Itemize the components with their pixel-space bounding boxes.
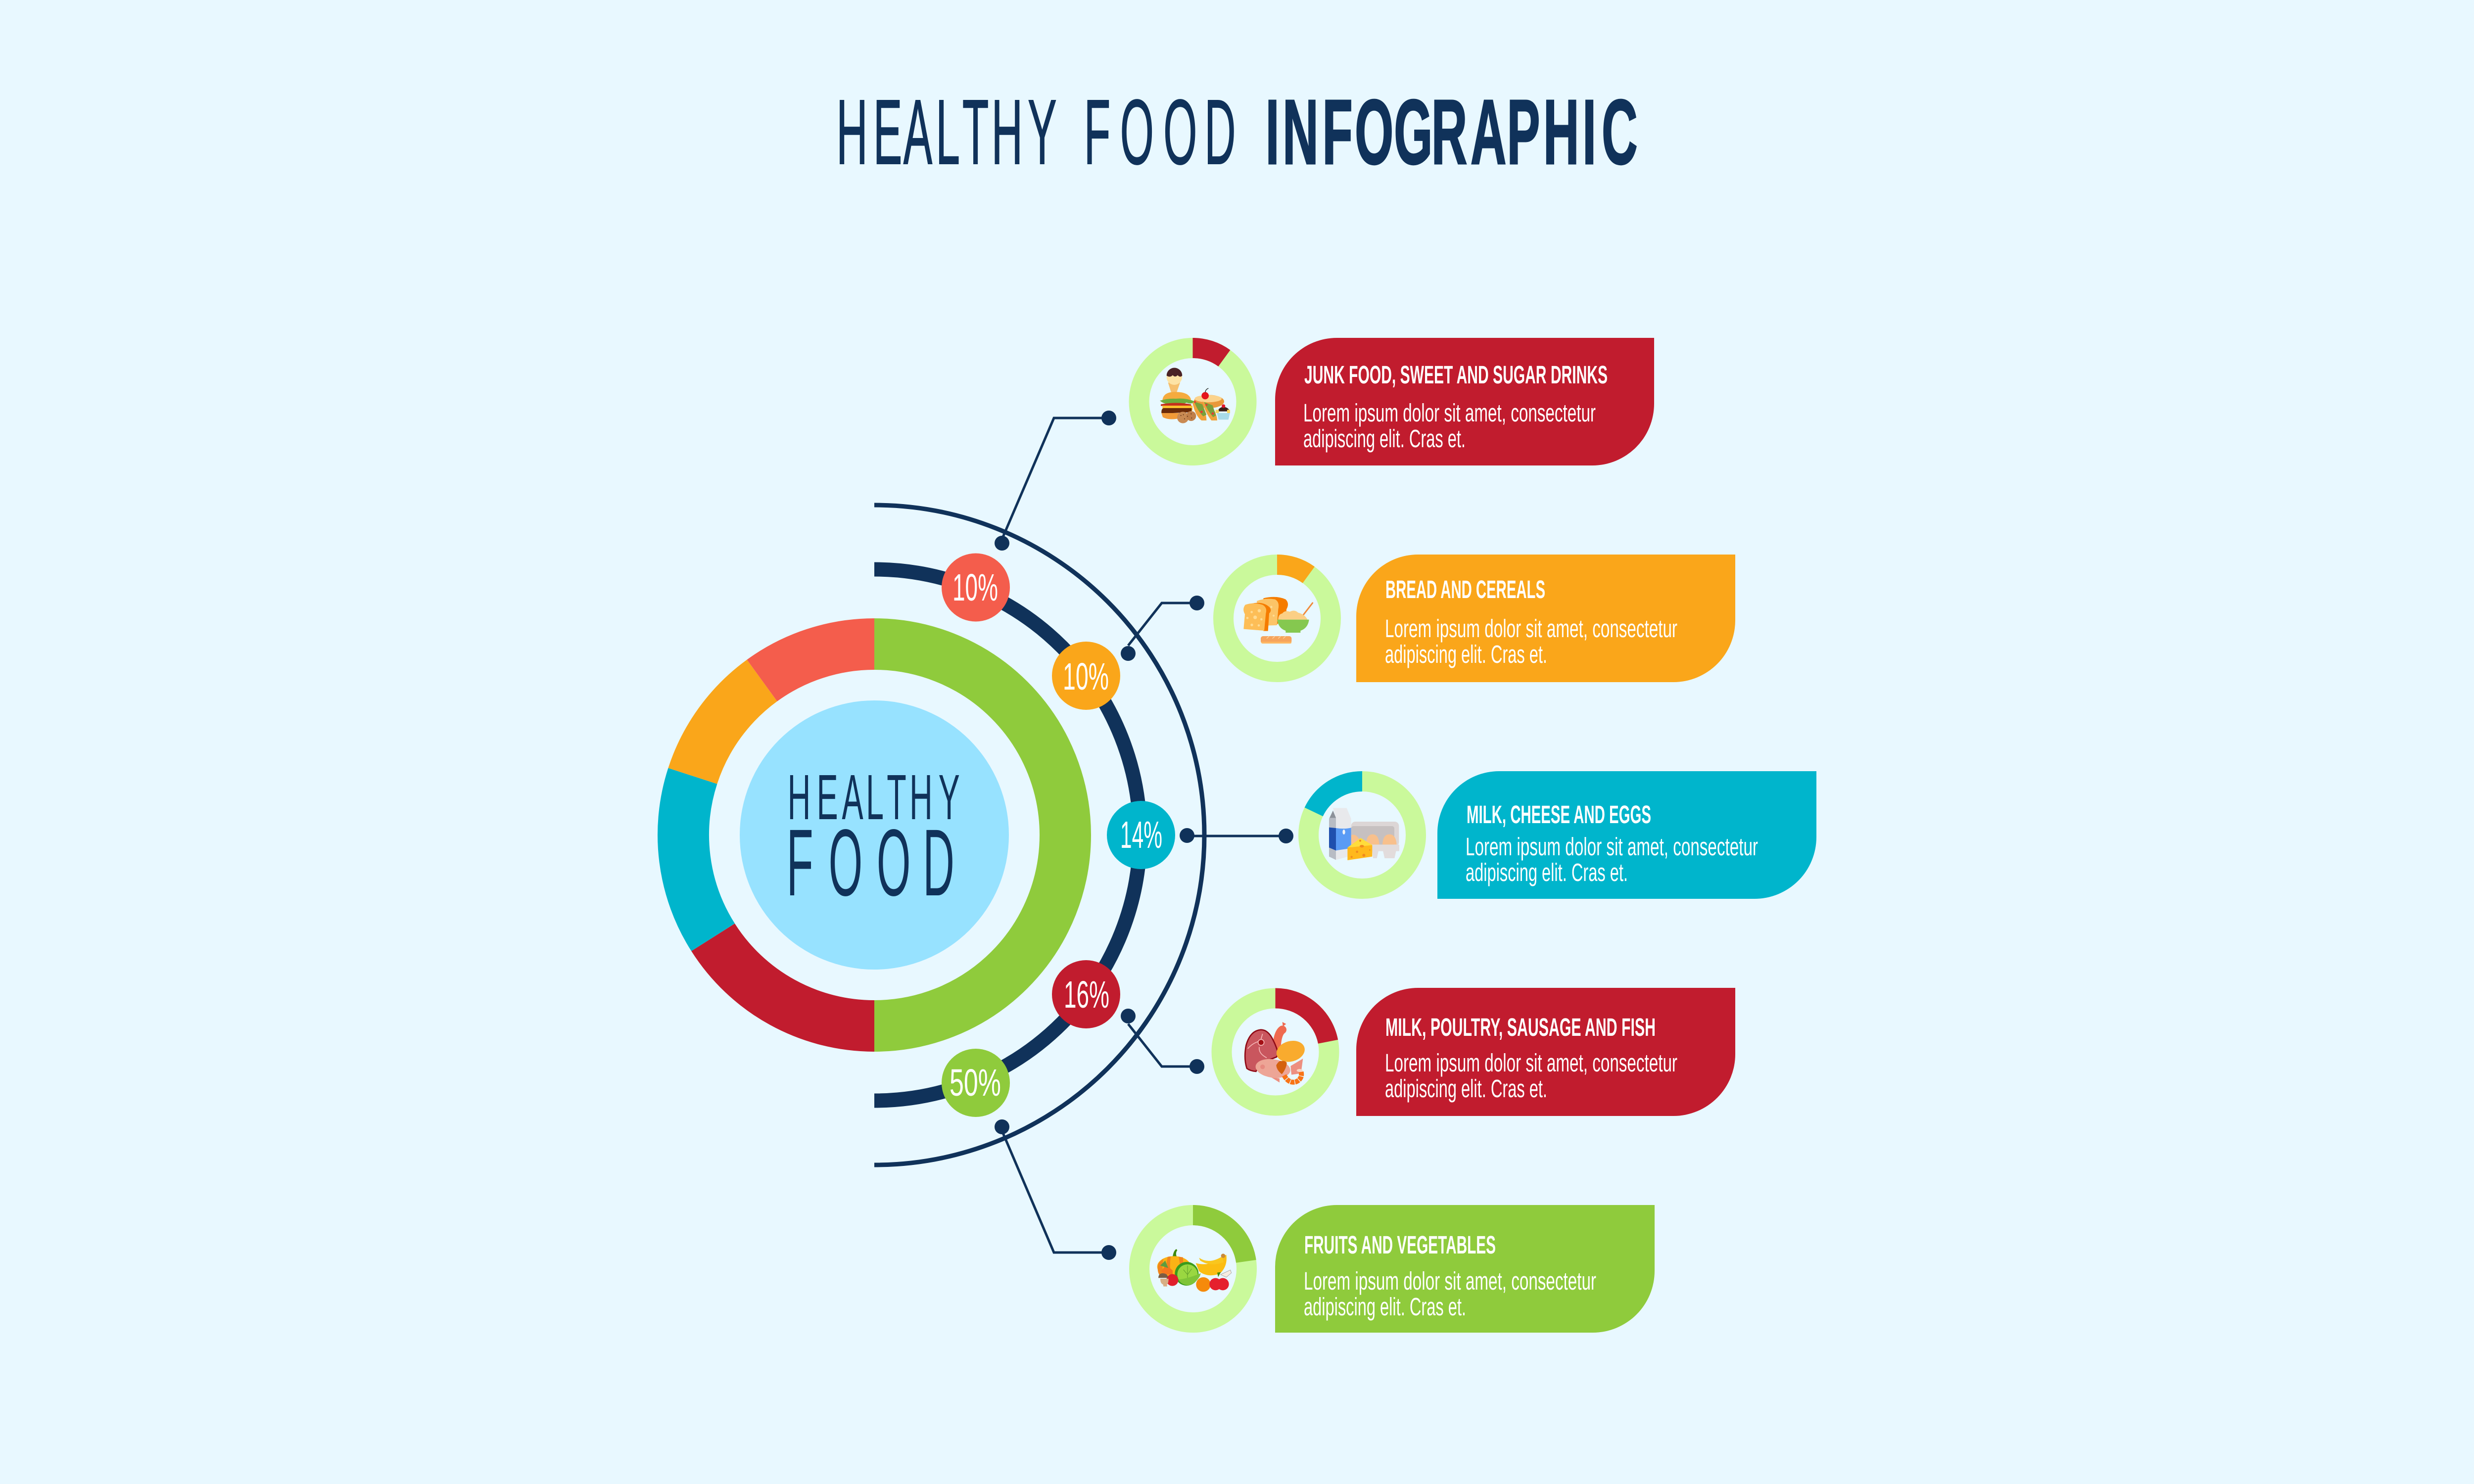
center label [740, 700, 1009, 970]
panel: milk, poultry, sausage and fish: adipiscing elit. Cras et. [1385, 1074, 1547, 1103]
panel: junk food: adipiscing elit. Cras et. [1303, 424, 1466, 453]
connector 4 [1121, 1009, 1204, 1074]
badge: 10% orange: 10% [1063, 655, 1109, 698]
ring: junk food [1139, 348, 1246, 455]
panel: bread and cereals [1356, 555, 1735, 682]
panel: bread and cereals: Lorem ipsum dolor sit amet, consectetur [1385, 614, 1677, 643]
panel: milk, poultry, sausage and fish [1356, 988, 1735, 1116]
icon: milk, cheese and eggs [1329, 808, 1399, 860]
icon: bread and cereals [1243, 597, 1313, 644]
connector 3 [1180, 828, 1293, 843]
title: HEALTHY FOOD [836, 80, 1236, 184]
title: INFOGRAPHIC [1266, 81, 1638, 184]
badge: 16% red: 16% [1064, 974, 1109, 1016]
panel: fruits and vegetables: FRUITS AND VEGETABLES [1304, 1231, 1496, 1259]
connector 1 [995, 411, 1116, 551]
segment: meat 16% [713, 937, 874, 1026]
segment: dairy 14% [683, 776, 713, 937]
title [836, 80, 1638, 184]
panel: milk, cheese and eggs: MILK, CHEESE AND EGGS [1467, 800, 1651, 829]
donut chart [683, 644, 1065, 1026]
badge: 50% green: 50% [950, 1062, 1001, 1104]
panel: milk, poultry, sausage and fish: MILK, POULTRY, SAUSAGE AND FISH [1385, 1013, 1656, 1041]
ring: fruits [1139, 1215, 1247, 1323]
panel: milk, poultry, sausage and fish: Lorem ipsum dolor sit amet, consectetur [1385, 1049, 1677, 1077]
panel: milk, cheese and eggs [1437, 771, 1816, 899]
panel: junk food [1275, 338, 1654, 465]
ring: bread [1223, 565, 1331, 672]
badge: 16% red [1052, 960, 1120, 1028]
panel: junk food: JUNK FOOD, SWEET AND SUGAR DRINKS [1304, 361, 1608, 389]
badge: 14% teal: 14% [1120, 814, 1162, 856]
panel: bread and cereals: BREAD AND CEREALS [1385, 575, 1545, 603]
panel: fruits and vegetables: adipiscing elit. Cras et. [1304, 1293, 1466, 1321]
icon: meat, poultry and fish [1245, 1022, 1307, 1082]
center label: HEALTHY [788, 761, 960, 833]
ring: dairy [1308, 782, 1416, 888]
segment: junk food 10% [762, 644, 874, 681]
panel: fruits and vegetables: Lorem ipsum dolor sit amet, consectetur [1304, 1267, 1596, 1295]
segment: bread 10% [693, 681, 762, 776]
panel: fruits and vegetables [1275, 1205, 1655, 1333]
icon: junk food [1160, 368, 1230, 423]
badge: 50% green [942, 1049, 1010, 1117]
icon: fruits and vegetables [1157, 1249, 1232, 1292]
badge: 14% teal [1107, 801, 1175, 869]
badge: 10% coral [942, 553, 1010, 621]
badge: 10% coral: 10% [952, 566, 998, 609]
panel: milk, cheese and eggs: Lorem ipsum dolor sit amet, consectetur [1466, 833, 1758, 861]
segment: fruits and vegetables 50% [874, 644, 1065, 1026]
panel: bread and cereals: adipiscing elit. Cras et. [1385, 640, 1547, 668]
connector 5 [995, 1119, 1116, 1260]
center label: FOOD [787, 810, 954, 916]
panel: junk food: Lorem ipsum dolor sit amet, consectetur [1303, 399, 1596, 427]
connector 2 [1121, 596, 1204, 661]
badge: 10% orange [1052, 642, 1120, 710]
panel: milk, cheese and eggs: adipiscing elit. Cras et. [1466, 858, 1628, 886]
ring: meat [1222, 998, 1329, 1106]
outer thin arc [874, 505, 1204, 1165]
thick navy arc [874, 569, 1140, 1101]
